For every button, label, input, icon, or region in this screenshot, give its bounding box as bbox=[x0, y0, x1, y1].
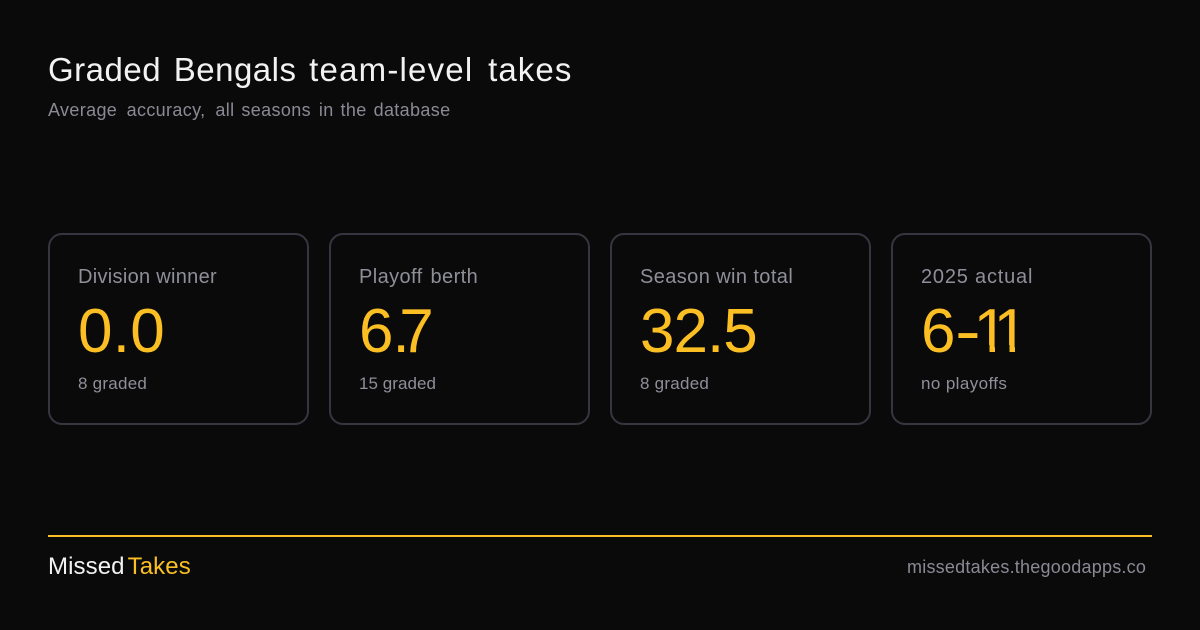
panel: 2025 actual bbox=[891, 233, 1152, 425]
value: 1 bbox=[994, 297, 1028, 366]
brand wordmark: MissedTakes bbox=[48, 553, 191, 580]
sample size: no playoffs bbox=[921, 374, 1007, 393]
value: 6 bbox=[921, 297, 955, 366]
value: 1 bbox=[974, 297, 1008, 366]
sample size: 15 graded bbox=[359, 374, 436, 393]
panel: playoff berth bbox=[329, 233, 590, 425]
label: Season win total bbox=[640, 266, 793, 288]
value: 6.7 bbox=[359, 297, 434, 366]
footer rule bbox=[48, 535, 1152, 537]
label: 2025 actual bbox=[921, 266, 1033, 288]
value: 32.5 bbox=[640, 297, 757, 366]
site url: missedtakes.thegoodapps.co bbox=[907, 557, 1146, 577]
label: Playoff berth bbox=[359, 266, 478, 288]
panel: season win total bbox=[610, 233, 871, 425]
panel: division winner bbox=[48, 233, 309, 425]
label: Division winner bbox=[78, 266, 217, 288]
subtitle: Average accuracy, all seasons in the database bbox=[48, 100, 450, 120]
value bbox=[921, 297, 1015, 366]
value: 0.0 bbox=[78, 297, 165, 366]
value: - bbox=[954, 297, 980, 366]
sample size: 8 graded bbox=[78, 374, 147, 393]
title: Graded Bengals team-level takes bbox=[48, 51, 572, 88]
sample size: 8 graded bbox=[640, 374, 709, 393]
